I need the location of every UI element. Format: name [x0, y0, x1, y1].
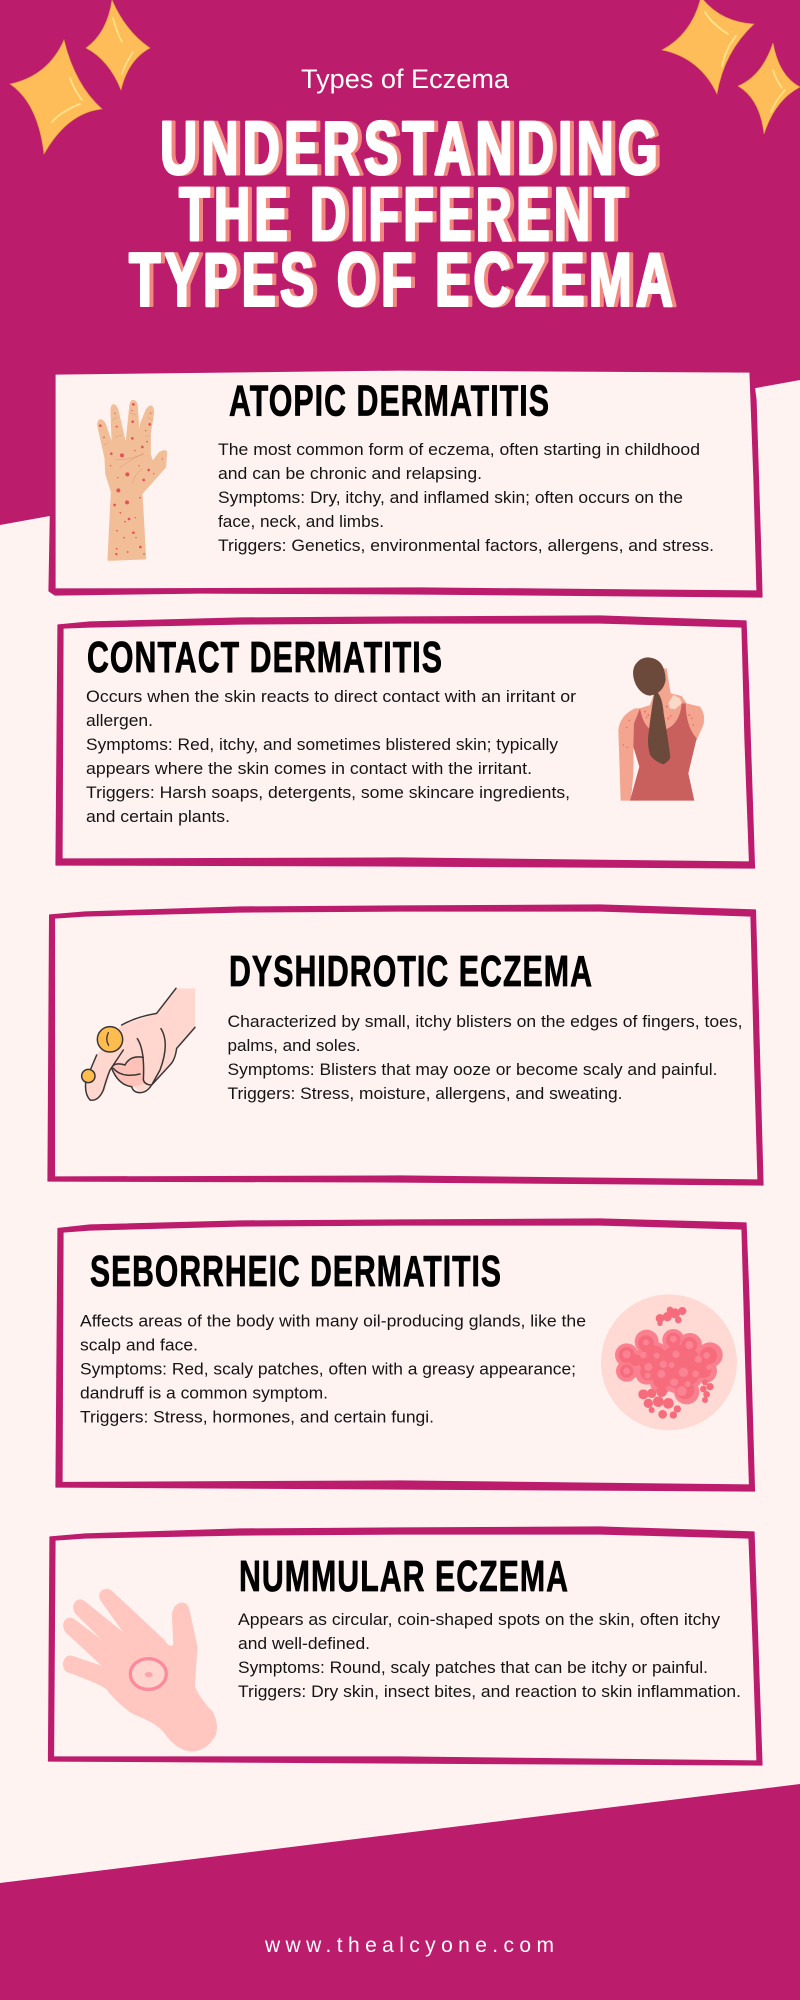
body text — [80, 1312, 586, 1426]
body text: Symptoms: Blisters that may ooze or become scaly and painful. — [228, 1060, 718, 1079]
panel: dyshidrotic eczema — [48, 905, 763, 1185]
subtitle: Types of Eczema — [301, 64, 510, 94]
body text: face, neck, and limbs. — [218, 512, 384, 531]
body text: appears where the skin comes in contact with the irritant. — [86, 759, 532, 778]
card frame — [56, 1219, 754, 1491]
body text: Triggers: Stress, moisture, allergens, and sweating. — [228, 1084, 622, 1103]
icon: woman with rash on back — [618, 657, 704, 801]
body text: and well-defined. — [238, 1634, 370, 1653]
body text: and can be chronic and relapsing. — [218, 464, 482, 483]
heading: SEBORRHEIC DERMATITIS — [90, 1247, 502, 1296]
body text: Triggers: Harsh soaps, detergents, some skincare ingredients, — [86, 783, 570, 802]
card fill — [55, 370, 757, 591]
heading: DYSHIDROTIC ECZEMA — [229, 947, 593, 996]
panel: nummular eczema — [48, 1527, 762, 1765]
top magenta band — [0, 0, 800, 525]
icon: palm with round patch — [64, 1590, 216, 1751]
body text: Triggers: Dry skin, insect bites, and reaction to skin inflammation. — [238, 1682, 741, 1701]
card frame — [56, 616, 754, 868]
body text: The most common form of eczema, often starting in childhood — [218, 440, 700, 459]
body text: scalp and face. — [80, 1336, 198, 1354]
heading: ATOPIC DERMATITIS — [229, 376, 550, 426]
title — [129, 106, 681, 322]
body text: dandruff is a common symptom. — [80, 1384, 328, 1402]
heading: NUMMULAR ECZEMA — [239, 1552, 569, 1601]
body text: Symptoms: Red, itchy, and sometimes blistered skin; typically — [86, 735, 558, 754]
panel: contact dermatitis — [56, 616, 754, 868]
body text: Occurs when the skin reacts to direct contact with an irritant or — [86, 687, 576, 706]
body text: Symptoms: Round, scaly patches that can be itchy or painful. — [238, 1658, 708, 1677]
body text: Appears as circular, coin-shaped spots on the skin, often itchy — [238, 1610, 721, 1629]
body text: Affects areas of the body with many oil-producing glands, like the — [80, 1312, 586, 1330]
body text: palms, and soles. — [228, 1036, 360, 1055]
panel: atopic dermatitis — [49, 366, 762, 597]
body text: allergen. — [86, 711, 153, 730]
footer website: www.thealcyone.com — [264, 1934, 554, 1957]
body text — [238, 1610, 741, 1701]
body text: Symptoms: Dry, itchy, and inflamed skin; often occurs on the — [218, 488, 683, 507]
card frame — [49, 366, 762, 597]
icon: hand with red spots — [99, 401, 166, 559]
panel: seborrheic dermatitis — [56, 1219, 754, 1491]
body text: Triggers: Genetics, environmental factors, allergens, and stress. — [218, 536, 714, 555]
icon: sparkle stars right — [662, 0, 800, 134]
icon: skin patch in circle — [601, 1294, 737, 1430]
card frame — [48, 1527, 762, 1765]
body text — [86, 687, 576, 826]
heading: CONTACT DERMATITIS — [87, 633, 443, 682]
icon: sparkle stars left — [10, 0, 150, 154]
bottom magenta band — [0, 1784, 800, 2000]
body text — [218, 440, 714, 555]
card frame — [48, 905, 763, 1185]
body text: and certain plants. — [86, 807, 230, 826]
body text: Symptoms: Red, scaly patches, often with a greasy appearance; — [80, 1360, 576, 1378]
body text: Characterized by small, itchy blisters on the edges of fingers, toes, — [228, 1012, 742, 1031]
body text: Triggers: Stress, hormones, and certain fungi. — [80, 1408, 434, 1426]
body text — [228, 1012, 742, 1103]
icon: fingers with blisters — [82, 988, 195, 1101]
